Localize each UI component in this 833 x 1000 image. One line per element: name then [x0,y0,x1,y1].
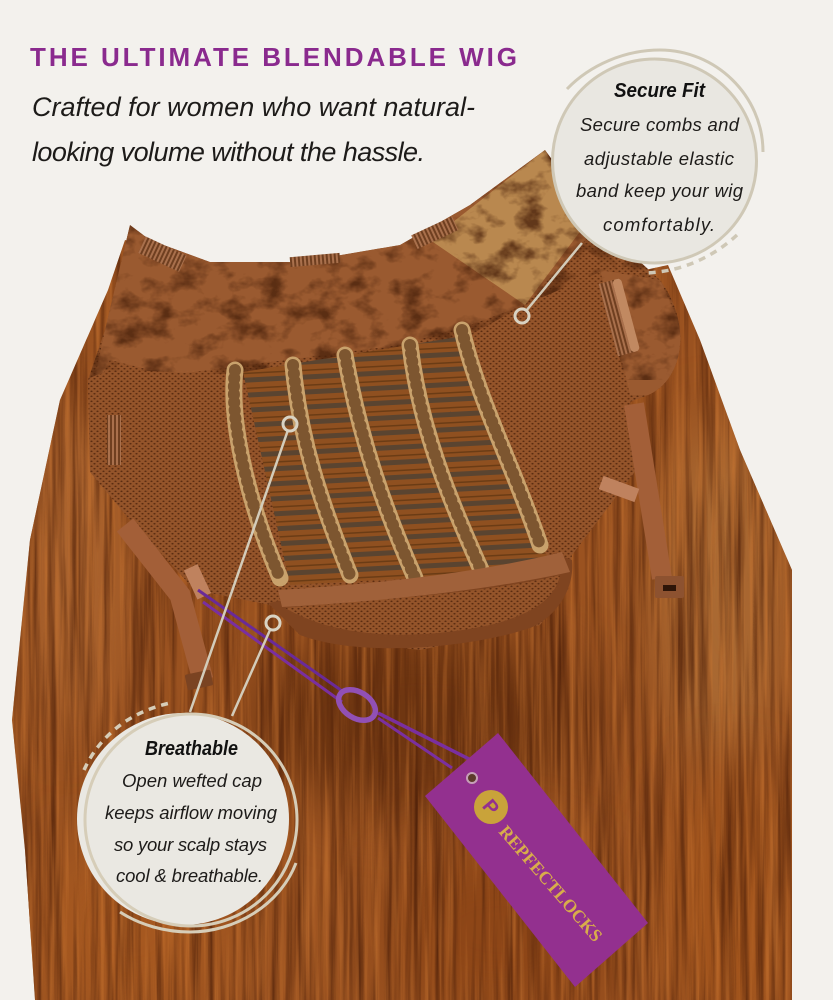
callout: breathable: so your scalp stays [114,834,267,855]
anchor ring [515,309,529,323]
purple cord and loop [198,590,477,768]
callout: secure fit: adjustable elastic [584,148,735,169]
callout: breathable: Breathable [145,738,238,760]
callout: secure fit: Secure Fit [614,80,706,102]
lower arc [120,863,296,932]
callout: secure fit: comfortably. [603,214,715,235]
right comb [599,278,640,356]
inner ring [85,714,297,926]
cord loop [333,683,381,727]
left small tab [184,564,211,599]
hang tag [425,733,648,987]
left buckle [185,669,213,691]
callout: secure fit: band keep your wig [576,180,744,201]
wig cap [80,140,690,691]
callout: breathable: keeps airflow moving [105,802,278,823]
dashed arc [645,235,737,273]
mesh cap base [88,150,680,650]
front mesh [285,575,560,635]
title: THE ULTIMATE BLENDABLE WIG [30,42,517,72]
leader line cap [190,430,288,712]
front binding [268,553,572,648]
hair [12,240,792,1000]
right strap [634,404,662,578]
top combs [107,216,458,465]
subtitle [32,92,475,167]
tag logo [474,790,508,824]
callout: secure fit: Secure combs and [580,114,740,135]
dashed arc [84,703,170,770]
leader line [526,243,582,311]
callout: breathable [77,417,297,932]
tag logo: P [478,795,503,820]
braid strips [234,330,540,578]
weft panel [243,335,560,585]
tag brand text: REPFECTLOCKS [495,822,607,946]
lace top band [80,140,690,590]
anchor ring vent [266,616,280,630]
outer arc [567,50,763,152]
left strap [125,525,203,680]
right small tab [599,476,639,502]
callout: secure fit [515,50,763,323]
leader line vent [232,630,270,716]
callout: breathable: cool & breathable. [116,865,263,886]
right buckle [655,576,684,598]
anchor ring cap [283,417,297,431]
front tabs [278,552,570,607]
subtitle: looking volume without the hassle. [32,137,425,167]
subtitle: Crafted for women who want natural- [32,92,475,122]
callout: breathable: Open wefted cap [122,770,262,791]
